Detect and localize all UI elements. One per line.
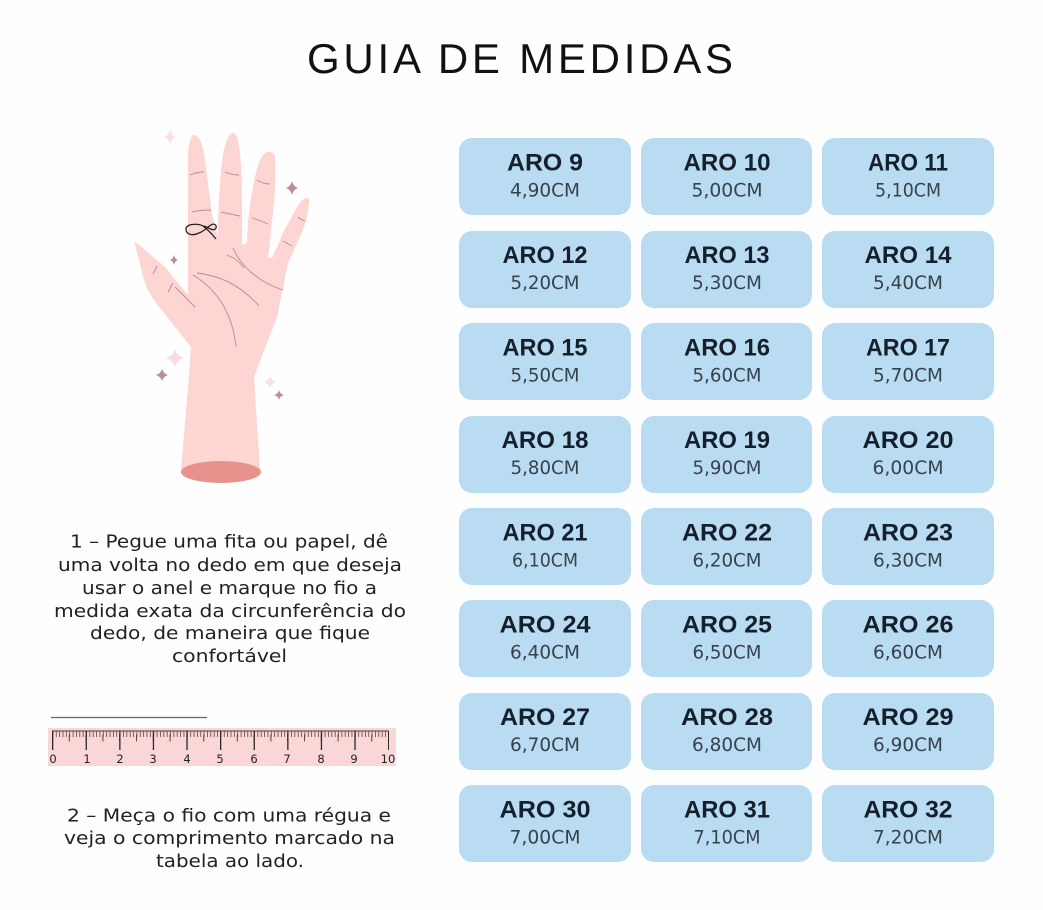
card: aro 19 [641, 416, 812, 493]
card: aro 23 [822, 508, 994, 585]
thread sample line [51, 716, 207, 718]
card: aro 11: ARO 11 [868, 150, 948, 176]
card: aro 26: ARO 26 [862, 612, 954, 638]
card: aro 10 [641, 138, 812, 215]
card: aro 31: 7,10CM [694, 828, 760, 848]
text block: step 1: uma volta no dedo em que deseja [58, 556, 402, 576]
card: aro 10: 5,00CM [692, 180, 762, 202]
card: aro 16 [641, 323, 812, 400]
icon: hand silhouette [135, 133, 309, 470]
card: aro 29 [822, 693, 994, 770]
card: aro 10: ARO 10 [684, 150, 770, 176]
ruler numbers: 8 [317, 752, 325, 766]
card: aro 26: 6,60CM [873, 642, 943, 664]
text block: step 2: 2 – Meça o fio com uma régua e [67, 806, 391, 826]
card: aro 20: ARO 20 [862, 427, 954, 454]
card: aro 13: 5,30CM [692, 273, 762, 294]
card: aro 14: ARO 14 [864, 242, 952, 269]
card: aro 22 [641, 508, 812, 585]
card: aro 18: ARO 18 [502, 427, 588, 454]
card: aro 25: 6,50CM [692, 642, 762, 664]
ruler numbers: 4 [183, 752, 191, 766]
card: aro 18: 5,80CM [510, 458, 580, 479]
card: aro 17: 5,70CM [873, 366, 943, 386]
card: aro 17 [822, 323, 994, 400]
card: aro 12 [459, 231, 631, 308]
card: aro 23: ARO 23 [863, 520, 953, 546]
card: aro 18 [459, 416, 631, 493]
finger and palm creases [153, 172, 305, 347]
card: aro 22: ARO 22 [682, 520, 772, 546]
card: aro 21: ARO 21 [502, 520, 588, 546]
card: aro 29: ARO 29 [862, 704, 954, 731]
card: aro 16: ARO 16 [684, 334, 770, 362]
ruler numbers: 9 [350, 752, 358, 766]
card: aro 32: 7,20CM [873, 828, 943, 848]
card: aro 16: 5,60CM [692, 366, 762, 386]
ruler numbers: 10 [381, 752, 395, 766]
text block: step 1 [54, 532, 406, 667]
card: aro 14: 5,40CM [873, 273, 943, 294]
ruler numbers: 2 [116, 752, 124, 766]
card: aro 24 [459, 600, 631, 677]
text block: step 1: 1 – Pegue uma fita ou papel, dê [70, 532, 388, 552]
ruler [48, 728, 396, 766]
card: aro 21: 6,10CM [512, 550, 578, 572]
card: aro 30 [459, 785, 631, 862]
card: aro 9: 4,90CM [510, 180, 580, 202]
card: aro 15: 5,50CM [510, 366, 580, 386]
card: aro 22: 6,20CM [692, 550, 762, 572]
card: aro 14 [822, 231, 994, 308]
card: aro 17: ARO 17 [866, 334, 950, 362]
ruler numbers: 0 [49, 752, 57, 766]
icon: sparkles [156, 130, 298, 400]
text block: step 1: confortável [172, 647, 287, 667]
ruler numbers: 1 [83, 752, 91, 766]
card: aro 24: 6,40CM [510, 642, 580, 664]
title: GUIA DE MEDIDAS [307, 35, 733, 82]
ruler numbers: 6 [250, 752, 258, 766]
card: aro 30: 7,00CM [510, 828, 580, 848]
card: aro 29: 6,90CM [873, 735, 943, 756]
card: aro 12: ARO 12 [502, 242, 588, 269]
text block: step 2: tabela ao lado. [156, 852, 304, 872]
card: aro 20 [822, 416, 994, 493]
card: aro 9 [459, 138, 631, 215]
ruler numbers: 7 [283, 752, 291, 766]
card: aro 28: ARO 28 [681, 704, 773, 731]
card: aro 24: ARO 24 [500, 612, 591, 638]
card: aro 19: 5,90CM [692, 458, 762, 479]
card: aro 31 [641, 785, 812, 862]
card: aro 32: ARO 32 [864, 796, 952, 824]
text block: step 1: dedo, de maneira que fique [90, 624, 370, 644]
card: aro 21 [459, 508, 631, 585]
text block: step 2 [64, 806, 395, 872]
ruler numbers: 5 [216, 752, 224, 766]
card: aro 23: 6,30CM [873, 550, 943, 572]
card: aro 25 [641, 600, 812, 677]
card: aro 26 [822, 600, 994, 677]
icon: wrist opening [181, 461, 261, 483]
card: aro 15 [459, 323, 631, 400]
card: aro 11 [822, 138, 994, 215]
icon: thread ring [186, 224, 216, 239]
ruler numbers [49, 752, 395, 766]
card: aro 19: ARO 19 [684, 427, 770, 454]
card: aro 20: 6,00CM [872, 458, 944, 479]
card: aro 15: ARO 15 [502, 334, 588, 362]
card: aro 27: 6,70CM [510, 735, 580, 756]
card: aro 31: ARO 31 [684, 796, 770, 824]
card: aro 30: ARO 30 [500, 796, 590, 824]
ruler numbers: 3 [149, 752, 157, 766]
card: aro 13 [641, 231, 812, 308]
text block: step 1: usar o anel e marque no fio a [82, 579, 377, 599]
card: aro 28: 6,80CM [692, 735, 762, 756]
card: aro 32 [822, 785, 994, 862]
illustration: hand with thread on finger [135, 130, 309, 483]
card: aro 12: 5,20CM [510, 273, 580, 294]
panel: size table [459, 138, 994, 862]
card: aro 27: ARO 27 [500, 704, 590, 731]
card: aro 27 [459, 693, 631, 770]
card: aro 25: ARO 25 [682, 612, 772, 638]
card: aro 9: ARO 9 [507, 150, 583, 176]
card: aro 13: ARO 13 [684, 242, 770, 269]
card: aro 28 [641, 693, 812, 770]
text block: step 2: veja o comprimento marcado na [64, 829, 395, 849]
text block: step 1: medida exata da circunferência do [54, 602, 406, 622]
card: aro 11: 5,10CM [875, 180, 941, 202]
